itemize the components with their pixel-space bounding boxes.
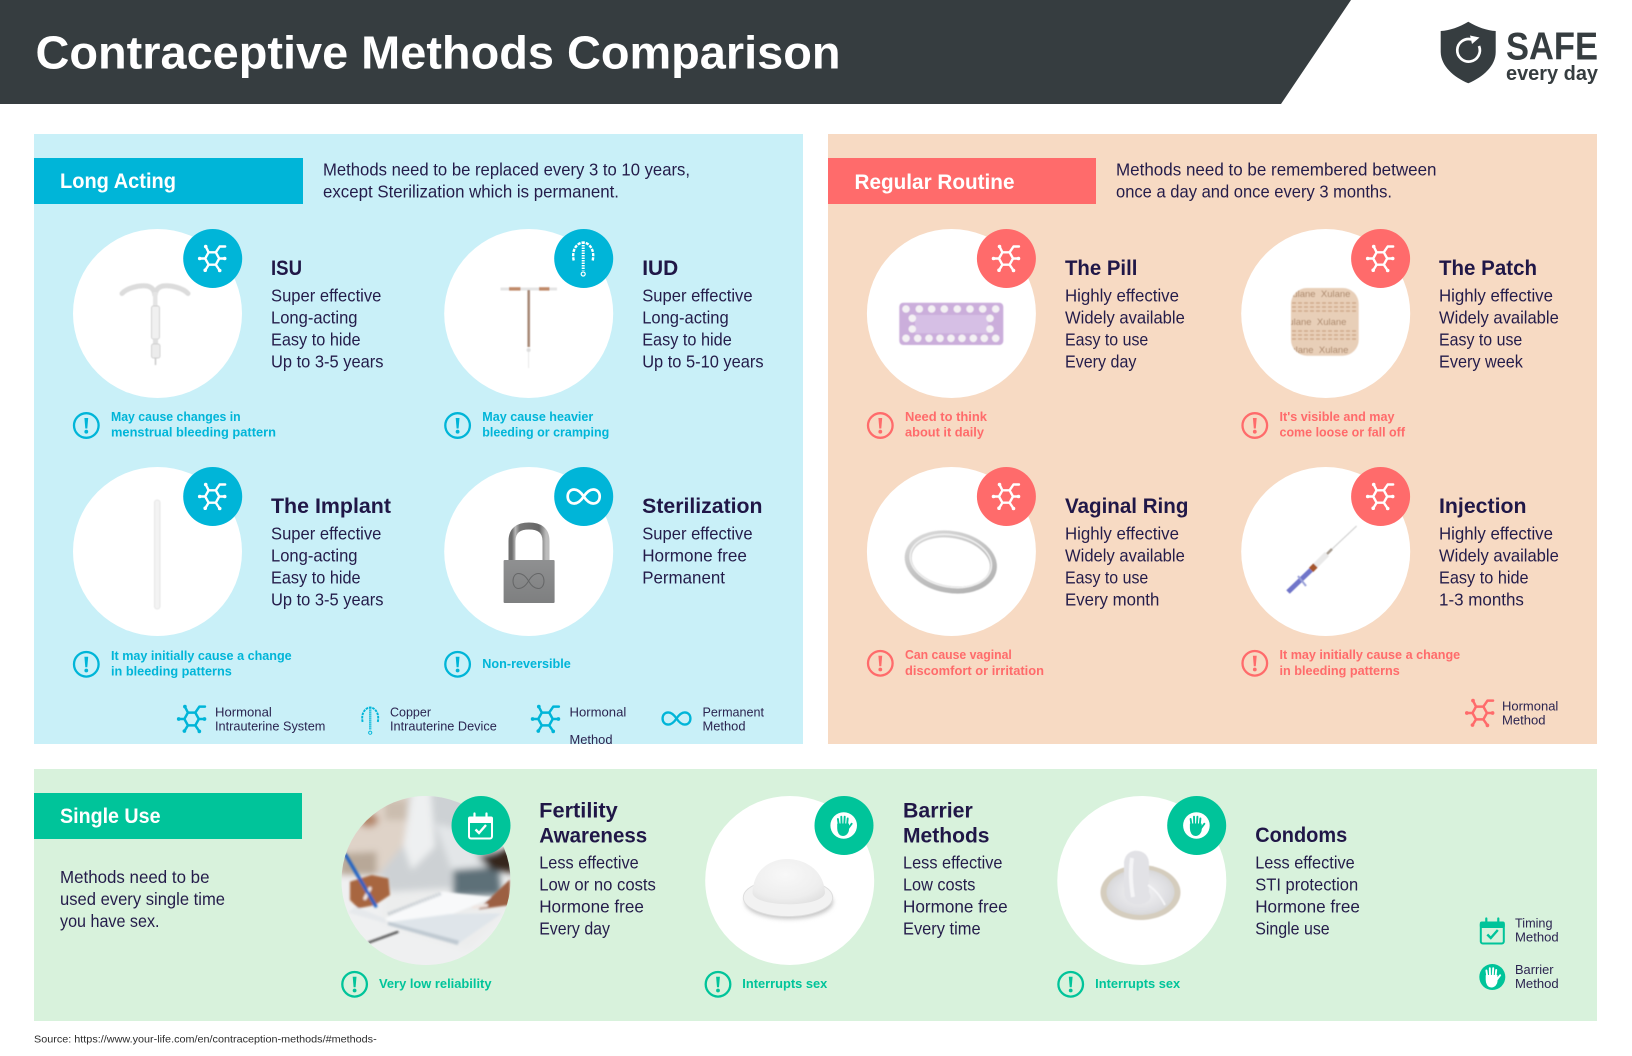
legend item: copper IUD (362, 704, 497, 734)
card: The Patch (1241, 229, 1559, 440)
feature list: Less effective (539, 853, 639, 873)
warning (1242, 648, 1460, 678)
warning (445, 410, 609, 440)
panel: single use (34, 769, 1597, 1021)
feature list: Easy to use (1065, 568, 1148, 588)
feature list: Highly effective (1065, 524, 1179, 544)
card: The Pill (867, 229, 1185, 440)
legend item: copper IUD: Intrauterine Device (390, 718, 497, 733)
warning (868, 410, 987, 440)
feature list: Up to 3-5 years (271, 352, 384, 372)
heading: Barrier (903, 799, 973, 822)
feature list (271, 286, 384, 372)
icon badge: permanent (554, 467, 613, 526)
description: single use: Methods need to be (60, 867, 210, 887)
feature list: Hormone free (903, 897, 1008, 917)
card: Fertility Awareness (328, 783, 656, 997)
feature list: Low or no costs (539, 875, 656, 895)
feature list: Single use (1255, 919, 1330, 939)
feature list (271, 524, 384, 610)
legend: timing method (1480, 915, 1559, 944)
warning: bleeding or cramping (482, 426, 609, 440)
feature list: Low costs (903, 875, 976, 895)
image: patch: Xulane Xulane (1284, 345, 1348, 356)
legend: hormonal method: Method (1502, 712, 1546, 727)
feature list: Easy to use (1065, 330, 1148, 350)
tab: Regular Routine (828, 158, 1096, 204)
feature list: Easy to hide (271, 330, 361, 350)
warning (74, 649, 292, 679)
heading: Fertility (539, 799, 618, 822)
feature list: 1-3 months (1439, 590, 1524, 610)
legend item: permanent method: Method (702, 718, 746, 733)
icon badge: hormonal (1351, 229, 1410, 288)
image: ISU device (122, 286, 188, 365)
title: Contraceptive Methods Comparison (36, 26, 840, 78)
feature list: STI protection (1255, 875, 1358, 895)
heading: Injection (1439, 495, 1526, 518)
legend item: hormonal IUS: Intrauterine System (215, 718, 325, 733)
warning (1058, 972, 1180, 997)
image: pill pack (899, 303, 1003, 345)
warning: May cause heavier (482, 410, 593, 424)
feature list: Widely available (1065, 546, 1185, 566)
description: regular routine: once a day and once every 3 months. (1116, 182, 1392, 202)
heading: Sterilization (642, 495, 762, 518)
heading: Awareness (539, 824, 647, 847)
panel: regular routine (828, 134, 1597, 744)
warning: Interrupts sex (742, 977, 827, 991)
logo word SAFE: SAFE (1506, 25, 1598, 68)
description: single use (60, 867, 225, 931)
feature list: Long-acting (642, 308, 729, 328)
image: diaphragm (743, 859, 833, 919)
warning: in bleeding patterns (111, 665, 232, 679)
warning (445, 652, 571, 677)
heading: Vaginal Ring (1065, 495, 1188, 518)
heading: ISU (271, 257, 302, 280)
feature list: Every day (1065, 352, 1137, 372)
legend: hormonal method: Hormonal (1502, 698, 1558, 713)
image: woman writing in notebook (342, 796, 510, 965)
legend item: copper IUD: Copper (390, 704, 432, 719)
logo: Safe every day (1441, 22, 1599, 85)
legend item: hormonal method (531, 704, 626, 747)
feature list: Widely available (1439, 308, 1559, 328)
warning: menstrual bleeding pattern (111, 426, 276, 440)
icon badge: barrier (814, 796, 874, 855)
feature list: Widely available (1439, 546, 1559, 566)
image: condom (1100, 851, 1180, 920)
image: patch (1282, 288, 1359, 356)
feature list (1065, 524, 1185, 610)
warning: Non-reversible (482, 657, 571, 671)
feature list (1255, 853, 1360, 939)
feature list: Every day (539, 919, 610, 939)
tab: Regular Routine: Regular Routine (854, 171, 1014, 194)
card: Injection (1241, 467, 1559, 678)
feature list: Easy to hide (642, 330, 732, 350)
feature list: Highly effective (1439, 524, 1553, 544)
icon badge: hormonal (1351, 467, 1410, 526)
feature list (1439, 286, 1559, 372)
legend: timing method: Method (1515, 929, 1559, 944)
card: Vaginal Ring (867, 467, 1188, 678)
warning (342, 972, 492, 997)
feature list: Long-acting (271, 546, 358, 566)
warning: May cause changes in (111, 410, 241, 424)
description: single use: used every single time (60, 889, 225, 909)
feature list (642, 524, 753, 588)
warning: Can cause vaginal (905, 648, 1012, 662)
legend item: permanent method: Permanent (702, 704, 764, 719)
heading: The Pill (1065, 257, 1137, 280)
heading: Methods (903, 824, 990, 847)
warning: It may initially cause a change (111, 649, 292, 663)
card: ISU (73, 229, 384, 440)
image: syringe (1288, 526, 1357, 592)
panel: long acting (34, 134, 803, 747)
image: patch: Xulane Xulane (1286, 289, 1350, 300)
feature list: Every time (903, 919, 981, 939)
icon badge: timing (452, 796, 510, 855)
feature list: Hormone free (642, 546, 747, 566)
heading: The Implant (271, 495, 391, 518)
feature list: Every month (1065, 590, 1159, 610)
feature list (539, 853, 656, 939)
feature list: Less effective (903, 853, 1002, 873)
warning: Interrupts sex (1095, 977, 1180, 991)
feature list: Highly effective (1065, 286, 1179, 306)
feature list: Widely available (1065, 308, 1185, 328)
legend: barrier method: Method (1515, 976, 1559, 991)
legend: timing method: Timing (1515, 915, 1552, 930)
warning (1242, 410, 1406, 440)
legend item: hormonal IUS: Hormonal (215, 704, 272, 719)
warning: about it daily (905, 426, 984, 440)
legend item: hormonal IUS (177, 704, 325, 733)
feature list (903, 853, 1008, 939)
card: Sterilization (444, 467, 762, 677)
feature list: Easy to hide (271, 568, 361, 588)
icon: shield (1441, 22, 1496, 83)
tab: Long Acting: Long Acting (60, 170, 176, 193)
feature list: Hormone free (1255, 897, 1360, 917)
warning: It's visible and may (1280, 410, 1395, 424)
warning: It may initially cause a change (1280, 648, 1460, 662)
feature list (1439, 524, 1559, 610)
feature list: Long-acting (271, 308, 358, 328)
feature list: Hormone free (539, 897, 644, 917)
feature list: Super effective (642, 524, 753, 544)
feature list: Permanent (642, 568, 725, 588)
heading (903, 799, 990, 847)
icon badge: hormonal (977, 229, 1036, 288)
feature list (642, 286, 764, 372)
feature list: Easy to use (1439, 330, 1522, 350)
image: IUD device (500, 287, 557, 368)
legend: hormonal method (1465, 698, 1558, 727)
legend: barrier method: Barrier (1515, 962, 1554, 977)
image: implant rod (154, 500, 160, 609)
description: single use: you have sex. (60, 911, 160, 931)
feature list: Every week (1439, 352, 1523, 372)
feature list: Up to 3-5 years (271, 590, 384, 610)
description: long acting (323, 160, 690, 202)
image: patch: Xulane Xulane (1282, 317, 1346, 328)
tab: Single Use (34, 793, 302, 839)
tab: Single Use: Single Use (60, 805, 160, 828)
legend item: permanent method (663, 704, 764, 733)
warning (868, 648, 1044, 678)
description: regular routine: Methods need to be remembered between (1116, 160, 1436, 180)
feature list: Easy to hide (1439, 568, 1529, 588)
logo word every day: every day (1506, 62, 1599, 85)
heading (539, 799, 647, 847)
legend: barrier method (1479, 962, 1559, 991)
legend item: hormonal method: Hormonal (570, 704, 626, 719)
source note: Source: https://www.your-life.com/en/contraception-methods/#methods- (34, 1034, 377, 1046)
warning: in bleeding patterns (1280, 664, 1400, 678)
feature list: Super effective (642, 286, 753, 306)
feature list: Super effective (271, 286, 381, 306)
header banner (0, 0, 1351, 104)
feature list: Highly effective (1439, 286, 1553, 306)
card: IUD (444, 229, 764, 440)
warning: discomfort or irritation (905, 664, 1044, 678)
legend item: hormonal method: Method (570, 732, 612, 747)
icon badge: copper IUD (554, 229, 613, 288)
feature list: Super effective (271, 524, 381, 544)
heading: The Patch (1439, 257, 1537, 280)
feature list: Up to 5-10 years (642, 352, 764, 372)
legend: long acting (177, 704, 764, 747)
heading: Condoms (1255, 824, 1347, 847)
icon badge: hormonal (183, 467, 242, 526)
description: regular routine (1116, 160, 1436, 202)
warning (706, 972, 827, 997)
card: The Implant (73, 467, 391, 679)
icon badge: barrier (1167, 796, 1226, 855)
warning: come loose or fall off (1280, 426, 1406, 440)
feature list (1065, 286, 1185, 372)
description: long acting: except Sterilization which is permanent. (323, 182, 619, 202)
warning: Very low reliability (379, 977, 492, 991)
image: padlock (504, 526, 555, 603)
image: ring (904, 527, 998, 597)
icon badge: hormonal (183, 229, 242, 288)
tab: Long Acting (34, 158, 303, 204)
warning: Need to think (905, 410, 987, 424)
card: Barrier Methods (705, 796, 1008, 997)
icon badge: hormonal (977, 467, 1036, 526)
feature list: Less effective (1255, 853, 1355, 873)
warning (74, 410, 276, 440)
card: Condoms (1057, 796, 1360, 997)
heading: IUD (642, 257, 678, 280)
description: long acting: Methods need to be replaced every 3 to 10 years, (323, 160, 690, 180)
